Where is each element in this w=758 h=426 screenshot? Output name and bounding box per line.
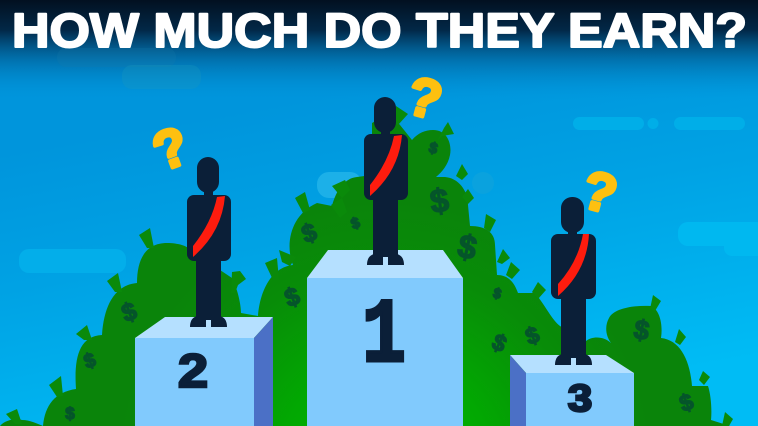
number 1: 1 (362, 286, 406, 390)
dollar signs: $ (81, 349, 99, 374)
background clouds (19, 48, 758, 273)
bag silhouette (0, 118, 730, 426)
pile of money bags (0, 106, 733, 426)
question marks: ? (576, 159, 623, 226)
podium 3 (510, 355, 634, 426)
dollar signs: $ (676, 388, 697, 417)
number 2: 2 (178, 344, 208, 397)
figure 2 (187, 157, 231, 327)
dollar signs: $ (349, 214, 363, 233)
dollar signs: $ (522, 321, 543, 350)
dollar signs: $ (298, 218, 321, 249)
dollar signs: $ (488, 328, 511, 357)
bag necks (6, 106, 733, 426)
dollar signs: $ (118, 297, 141, 328)
dollar signs: $ (65, 404, 75, 423)
dollar signs: $ (428, 181, 451, 220)
dollar signs: $ (281, 282, 304, 313)
sash (558, 234, 589, 296)
question marks: ? (401, 65, 448, 132)
figure 1 (364, 97, 408, 265)
figure 3 (551, 197, 596, 365)
question marks (145, 65, 623, 226)
question marks: ? (145, 115, 197, 183)
sash (193, 196, 225, 257)
title: HOW MUCH DO THEY EARN? (12, 5, 747, 58)
podium 2 (135, 317, 273, 426)
number 3: 3 (568, 377, 592, 419)
podium 1 (307, 250, 463, 426)
dollar signs: $ (455, 227, 480, 267)
sash (370, 135, 402, 196)
dollar signs: $ (427, 139, 440, 158)
dollar signs: $ (491, 284, 503, 302)
dollar signs: $ (632, 314, 652, 346)
dollar signs (65, 139, 697, 423)
